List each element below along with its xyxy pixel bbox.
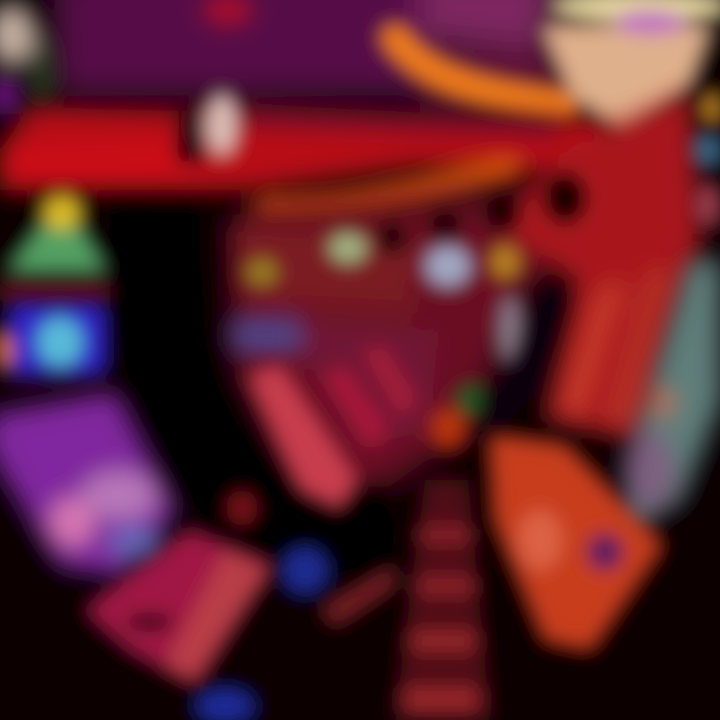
left: blue slot screen [0, 305, 110, 388]
right grey-blue machines [625, 260, 720, 530]
bottom blue and red details [195, 490, 395, 720]
orange glow under band [265, 165, 510, 208]
center: red and pink slanted machines [248, 345, 420, 510]
ceiling: purple and maroon top band [55, 0, 560, 110]
center machines: lavender and warm lights [232, 225, 440, 450]
center red wash [232, 190, 560, 500]
top left corner lights [0, 0, 252, 115]
right red wall [500, 90, 700, 440]
dark ceiling lamps row [378, 174, 585, 252]
beige canopy with pink top [540, 0, 720, 135]
left: purple slot panel [0, 393, 175, 575]
dark archway right of center [490, 290, 555, 415]
black arch [155, 205, 390, 530]
bottom aisle carpet stripes [395, 480, 490, 720]
center small lights [246, 232, 522, 448]
red ceiling band [0, 105, 620, 190]
left: green and yellow pyramid [0, 194, 110, 300]
right edge lights [694, 92, 720, 227]
white column light [178, 93, 238, 162]
left: pink console [85, 530, 272, 685]
orange ceiling stroke [395, 38, 565, 104]
right orange-red console [490, 435, 662, 650]
